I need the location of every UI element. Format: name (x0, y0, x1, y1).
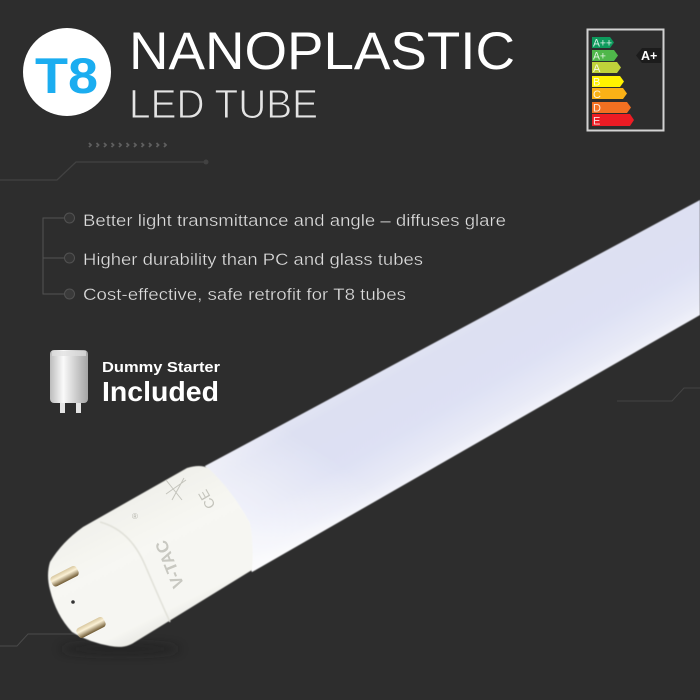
energy label: A+ (593, 50, 606, 62)
energy label: A++ (593, 38, 612, 50)
feature list: Higher durability than PC and glass tubes (83, 250, 423, 269)
cap marking: recycling symbol (166, 478, 186, 500)
chevron strip (89, 143, 166, 147)
energy label: A+ (641, 49, 657, 63)
energy label: A (593, 63, 601, 75)
circuit line right (617, 388, 700, 401)
badge: T8: T8 (35, 48, 98, 104)
energy label: D (593, 102, 601, 114)
badge: T8 (23, 28, 111, 116)
cap marking: CE: CE (195, 487, 218, 512)
callout: dummy starter included: Dummy Starter (102, 360, 220, 376)
feature list (83, 211, 506, 304)
cap marking: V-TAC: V-TAC (152, 537, 188, 591)
shadow under tube cap (60, 644, 180, 654)
energy label: E (593, 116, 600, 128)
energy label: B (593, 76, 600, 88)
LED tube (48, 200, 700, 647)
title: NANOPLASTIC (129, 22, 515, 81)
title (129, 22, 515, 127)
feature list: Better light transmittance and angle – diffuses glare (83, 211, 506, 230)
callout: dummy starter included: Included (102, 376, 219, 407)
feature list: Cost-effective, safe retrofit for T8 tubes (83, 285, 406, 304)
cap marking: registered: ® (132, 512, 138, 521)
icon: dummy starter (50, 350, 88, 413)
tube body (205, 200, 700, 572)
title: LED TUBE (129, 81, 318, 127)
circuit line top (0, 160, 208, 180)
energy label: C (593, 89, 601, 101)
energy label (588, 30, 664, 130)
tube end cap (48, 466, 253, 647)
callout: dummy starter included (102, 360, 220, 407)
bullet connector (43, 213, 74, 299)
circuit line bottom left (0, 634, 85, 646)
pin holes and pins (49, 565, 107, 639)
